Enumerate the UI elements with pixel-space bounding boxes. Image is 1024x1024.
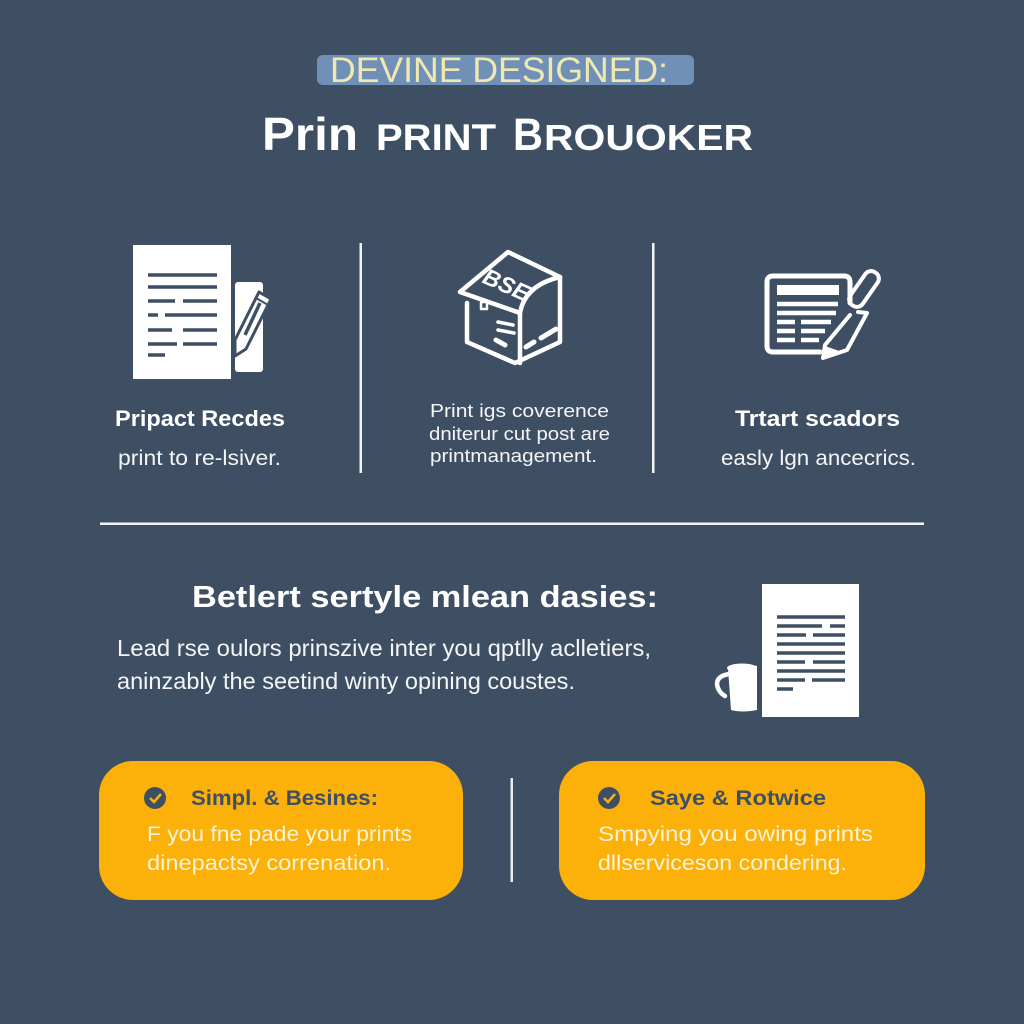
heading: Simpl. & Besines: xyxy=(191,787,378,810)
heading: Betlert sertyle mlean dasies: xyxy=(192,579,658,614)
title xyxy=(262,108,753,160)
divider xyxy=(360,243,362,473)
panel: callout left xyxy=(99,761,463,900)
text: Print igs coverence xyxy=(430,400,609,421)
text: F you fne pade your prints xyxy=(147,822,412,846)
text: dinepactsy correnation. xyxy=(147,851,391,875)
icon: printer box xyxy=(460,252,560,363)
text: printmanagement. xyxy=(430,445,597,466)
divider xyxy=(652,243,654,473)
panel: left column xyxy=(115,245,285,470)
panel: right column xyxy=(721,268,916,470)
panel: callout right xyxy=(559,761,925,900)
text: easly lgn ancecrics. xyxy=(721,447,916,470)
divider xyxy=(100,522,924,525)
header badge: DEVINE DESIGNED: xyxy=(330,51,668,90)
icon: document with pencil xyxy=(133,245,271,379)
icon: printer box: BSE xyxy=(479,263,534,307)
text: dniterur cut post are xyxy=(429,423,610,444)
heading: Saye & Rotwice xyxy=(650,787,826,810)
title: B xyxy=(513,109,543,160)
text: dllserviceson condering. xyxy=(598,851,847,875)
text xyxy=(429,400,610,466)
text xyxy=(598,822,873,875)
icon: check xyxy=(144,787,166,809)
divider xyxy=(510,778,513,882)
text xyxy=(117,635,651,694)
text: Smpying you owing prints xyxy=(598,822,873,846)
title: ROUOKER xyxy=(544,117,753,158)
icon: form and pen xyxy=(767,268,882,358)
panel: middle text xyxy=(117,579,658,694)
title: PRINT xyxy=(376,117,496,158)
icon: mug and document xyxy=(717,584,859,717)
heading: Trtart scadors xyxy=(735,406,900,431)
text xyxy=(147,822,412,875)
text: print to re-lsiver. xyxy=(118,447,281,470)
panel: center column xyxy=(429,252,610,466)
heading: Pripact Recdes xyxy=(115,406,285,431)
title: Prin xyxy=(262,108,358,160)
text: aninzably the seetind winty opining coustes. xyxy=(117,668,575,694)
text: Lead rse oulors prinszive inter you qptlly aclletiers, xyxy=(117,635,651,661)
icon: check xyxy=(598,787,620,809)
